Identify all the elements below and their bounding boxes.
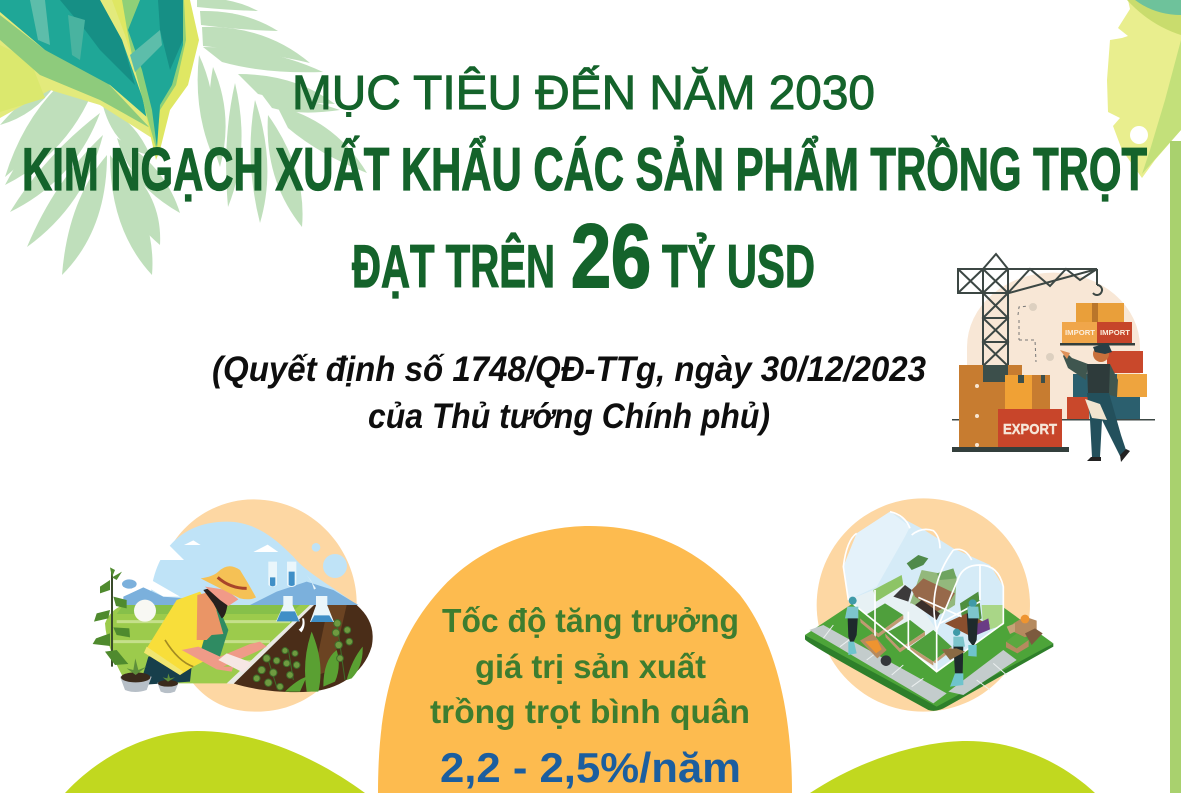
icon: farmer in field illustration bbox=[93, 499, 373, 712]
callout text bbox=[430, 602, 750, 730]
title bbox=[22, 66, 1147, 307]
frame bbox=[843, 512, 1003, 672]
decision reference text: của Thủ tướng Chính phủ) bbox=[368, 397, 770, 436]
title line 3 bbox=[352, 207, 815, 307]
decoration: leaf top right bbox=[1107, 0, 1181, 178]
greenhouse shell bbox=[843, 512, 1003, 672]
callout text: trồng trọt bình quân bbox=[430, 693, 750, 730]
icon: greenhouse illustration bbox=[805, 498, 1053, 712]
plant left bbox=[93, 567, 130, 667]
soil seedlings bbox=[253, 620, 353, 690]
labels: IMPORT bbox=[1065, 328, 1130, 337]
icon: export import crane illustration bbox=[952, 254, 1155, 462]
worker bbox=[1060, 343, 1130, 462]
farmer bbox=[140, 566, 267, 685]
callout text: giá trị sản xuất bbox=[475, 648, 706, 685]
vegetable crates bbox=[1006, 615, 1043, 653]
decoration: palm fronds top left bbox=[0, 0, 367, 275]
growth rate figure: 2,2 - 2,5%/năm bbox=[440, 744, 741, 791]
front beds bbox=[860, 603, 952, 666]
title line 3: TỶ USD bbox=[662, 233, 815, 300]
interior crops bbox=[910, 570, 957, 617]
callout text: Tốc độ tăng trưởng bbox=[442, 602, 739, 639]
title line 1: MỤC TIÊU ĐẾN NĂM 2030 bbox=[292, 66, 875, 120]
decoration: tropical leaves top left bbox=[0, 0, 199, 160]
title line 3: ĐẠT TRÊN bbox=[352, 233, 555, 300]
panel: central orange growth-rate callout bbox=[378, 526, 792, 793]
wheelbarrow bbox=[860, 633, 891, 666]
decision reference text bbox=[212, 350, 926, 436]
labels: IMPORT: IMPORT bbox=[1100, 328, 1130, 337]
flasks and test tubes bbox=[268, 562, 334, 632]
label: EXPORT: EXPORT bbox=[1003, 421, 1057, 438]
decoration: right green mound bbox=[810, 741, 1095, 793]
plant pots bbox=[120, 658, 179, 693]
labels: IMPORT: IMPORT bbox=[1065, 328, 1095, 337]
decoration: left green mound bbox=[65, 731, 365, 793]
title line 3: 26 bbox=[571, 207, 651, 307]
decision reference text: (Quyết định số 1748/QĐ-TTg, ngày 30/12/2023 bbox=[212, 350, 926, 389]
workers bbox=[845, 597, 979, 687]
ground platform bbox=[805, 553, 1053, 710]
decoration: right side bar bbox=[1170, 141, 1181, 793]
